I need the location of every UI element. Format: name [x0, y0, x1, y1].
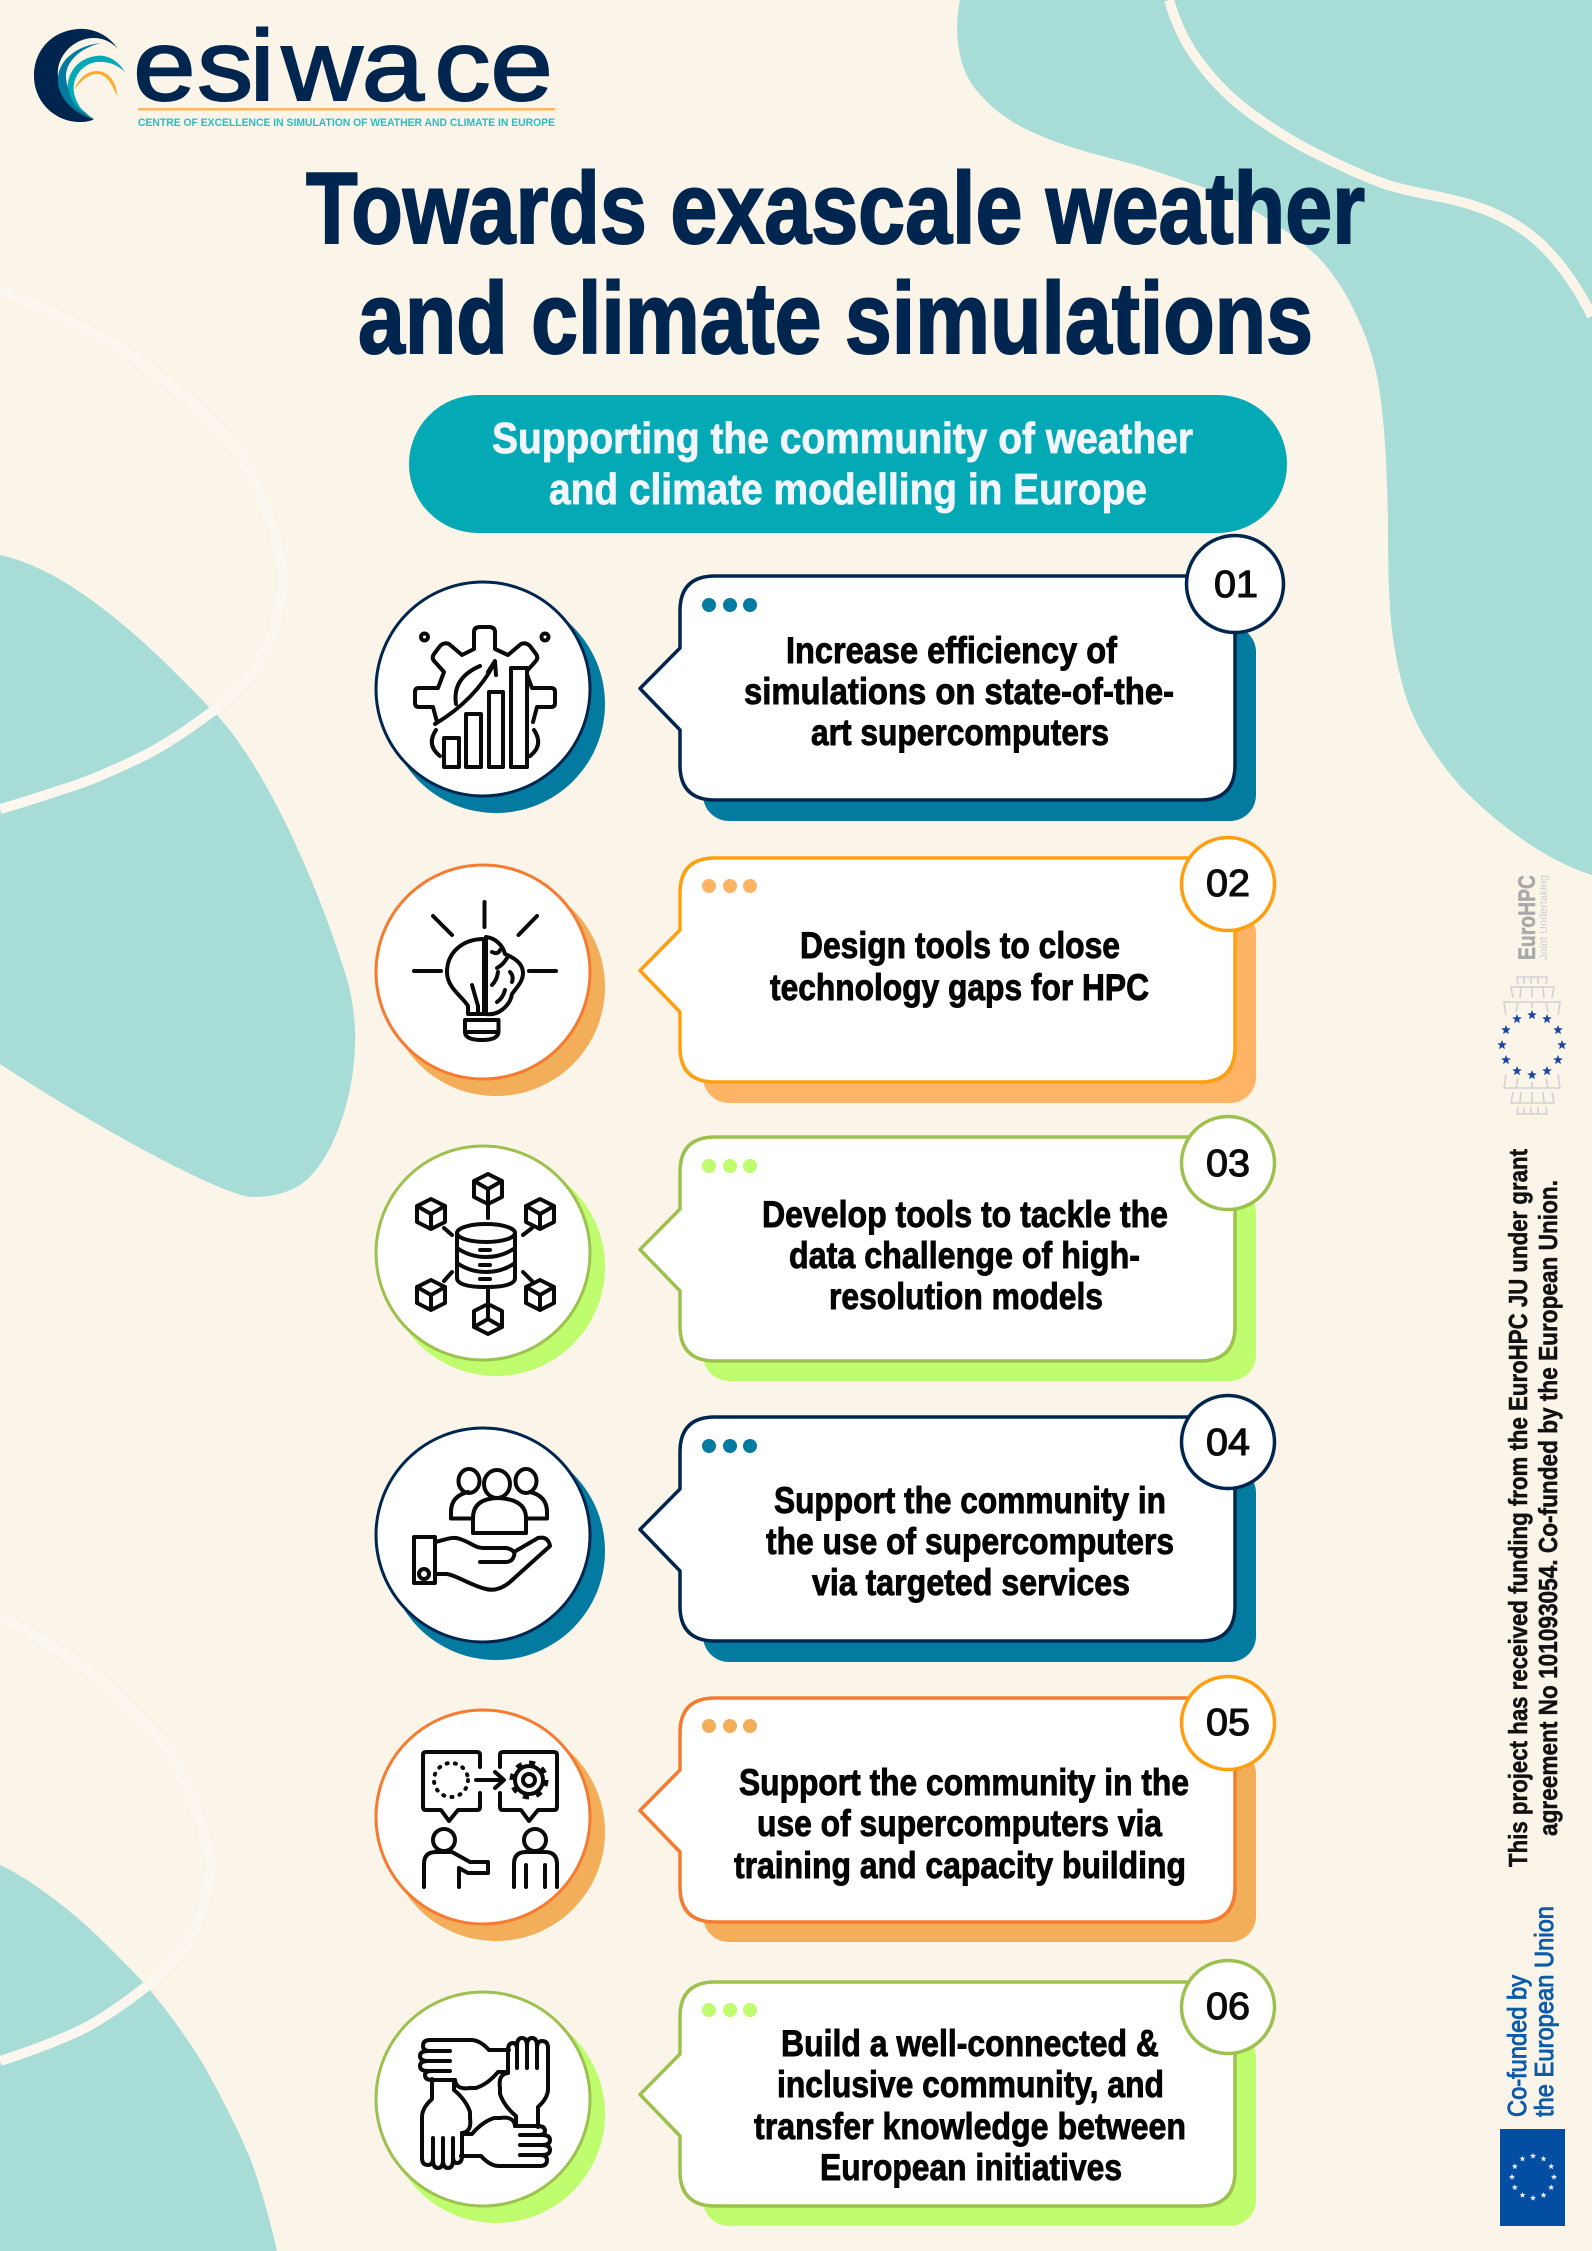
number badge: 04	[1206, 1422, 1250, 1464]
dots	[702, 1719, 757, 1733]
card text: simulations on state-of-the-	[744, 671, 1174, 712]
card text: resolution models	[829, 1276, 1103, 1317]
number badge: 06	[1206, 1986, 1250, 2028]
co-funded text: the European Union	[1529, 1906, 1559, 2117]
EuroHPC logo	[1497, 875, 1567, 1114]
icon: EU flag	[1500, 2129, 1565, 2226]
card text: transfer knowledge between	[754, 2106, 1186, 2147]
step 03	[376, 1116, 1274, 1381]
card	[703, 1748, 1256, 1942]
card text: technology gaps for HPC	[770, 967, 1149, 1008]
number badge: 05	[1206, 1702, 1250, 1744]
dots	[702, 1439, 757, 1453]
card text: use of supercomputers via	[757, 1803, 1162, 1844]
icon: trainer and trainee with speech bubbles	[376, 1710, 605, 1941]
card text	[734, 1762, 1189, 1886]
card text: Design tools to close	[800, 925, 1120, 966]
dots	[702, 879, 757, 893]
step 01	[376, 536, 1284, 821]
card text	[766, 1480, 1174, 1603]
dots	[702, 1159, 757, 1173]
number badge	[1182, 838, 1274, 930]
funding statement: This project has received funding from the EuroHPC JU under grant	[1503, 1149, 1533, 1867]
number badge	[1182, 1396, 1274, 1488]
card text	[762, 1194, 1168, 1317]
card text	[744, 630, 1174, 753]
icon: database with cubes	[376, 1146, 605, 1376]
dots	[702, 2003, 757, 2017]
card text: inclusive community, and	[777, 2064, 1164, 2105]
number badge: 01	[1214, 564, 1258, 606]
funding statement: agreement No 101093054. Co-funded by the European Union.	[1533, 1180, 1563, 1836]
card	[703, 1467, 1256, 1662]
EuroHPC wordmark	[1514, 875, 1550, 960]
icon: lightbulb with brain	[376, 865, 605, 1096]
icon: gear with rising bars	[376, 582, 605, 813]
subtitle pill: and climate modelling in Europe	[549, 465, 1147, 514]
title: Towards exascale weather	[306, 153, 1365, 265]
dots	[702, 598, 757, 612]
icon: logo swirl	[34, 29, 125, 122]
card text: European initiatives	[820, 2147, 1122, 2188]
EuroHPC wordmark: Joint Undertaking	[1538, 875, 1550, 960]
subtitle pill: Supporting the community of weather	[492, 414, 1193, 463]
EuroHPC wordmark: EuroHPC	[1514, 875, 1541, 960]
number badge	[1182, 1960, 1274, 2054]
title: and climate simulations	[358, 263, 1313, 375]
icon: EuroHPC star ring	[1497, 1010, 1567, 1079]
card text	[754, 2023, 1186, 2188]
icon: EuroHPC arches	[1504, 977, 1560, 1114]
number badge	[1182, 1116, 1274, 1210]
step 04	[376, 1396, 1274, 1662]
card	[703, 626, 1256, 821]
title	[306, 153, 1365, 375]
card text: via targeted services	[812, 1562, 1130, 1603]
co-funded text	[1502, 1906, 1559, 2117]
card text: training and capacity building	[734, 1845, 1186, 1886]
icon: hand holding people	[376, 1428, 605, 1660]
card text	[770, 925, 1149, 1008]
card text: Increase efficiency of	[786, 630, 1118, 671]
card	[703, 1187, 1256, 1381]
card text: the use of supercomputers	[766, 1521, 1174, 1562]
card text: Develop tools to tackle the	[762, 1194, 1168, 1235]
co-funded text: Co-funded by	[1502, 1975, 1532, 2117]
number badge	[1182, 1676, 1274, 1770]
card	[703, 2032, 1256, 2226]
number badge: 02	[1206, 863, 1250, 905]
logo wordmark: esiwace	[133, 11, 553, 122]
logo tagline: CENTRE OF EXCELLENCE IN SIMULATION OF WEATHER AND CLIMATE IN EUROPE	[138, 117, 555, 129]
number badge	[1186, 536, 1284, 632]
step 02	[376, 838, 1274, 1103]
funding statement	[1503, 1149, 1563, 1867]
logo: ESiWACE	[34, 11, 555, 129]
co-funded by the EU	[1500, 1906, 1565, 2226]
card text: art supercomputers	[811, 712, 1109, 753]
card text: Support the community in	[774, 1480, 1166, 1521]
card text: Build a well-connected &	[781, 2023, 1159, 2064]
subtitle pill	[409, 395, 1287, 533]
step 06	[376, 1960, 1274, 2226]
step 05	[376, 1676, 1274, 1942]
number badge: 03	[1206, 1143, 1250, 1185]
card text: Support the community in the	[739, 1762, 1189, 1803]
icon: four interlocking hands	[376, 1992, 605, 2223]
card text: data challenge of high-	[789, 1235, 1140, 1276]
card	[703, 908, 1256, 1103]
